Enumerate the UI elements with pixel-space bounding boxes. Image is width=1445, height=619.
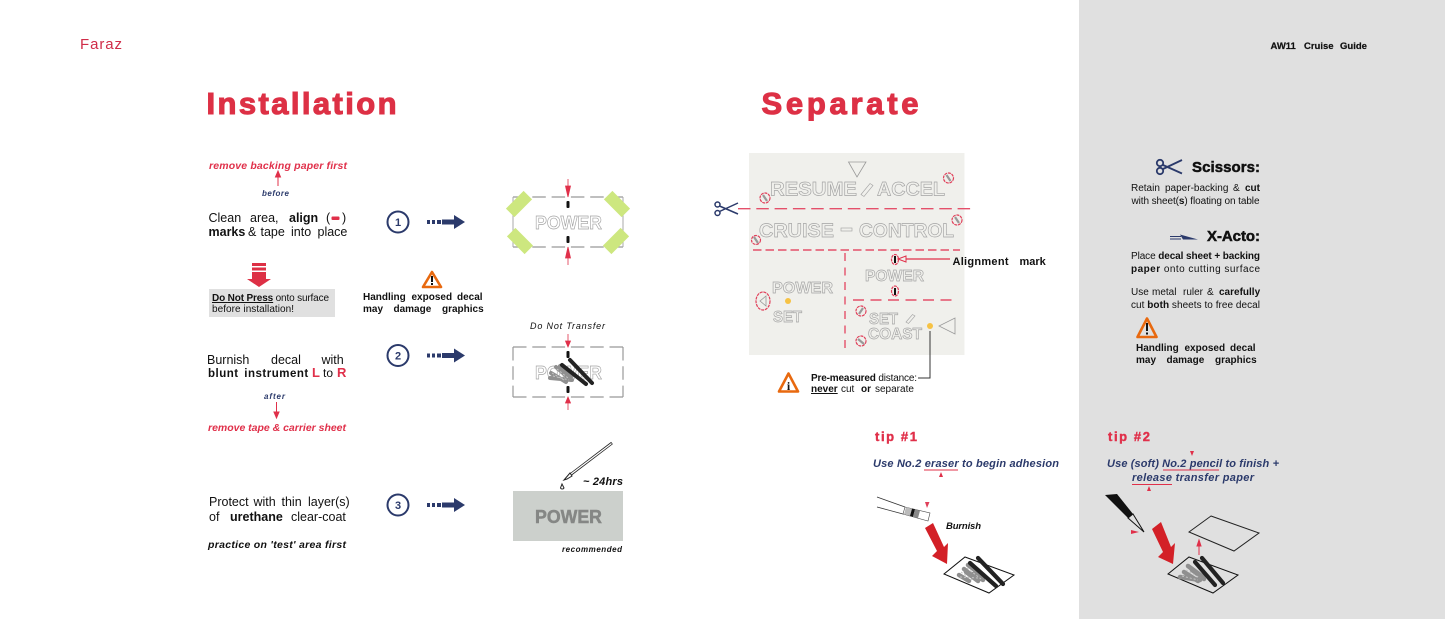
- icon: scissors at cut line: [715, 202, 738, 216]
- callout: pre-measured distance: or: [861, 384, 871, 395]
- panel: step 3 instructions: with: [252, 495, 276, 509]
- guide title: Guide: [1340, 41, 1367, 52]
- guide title: AW11: [1270, 41, 1297, 52]
- warning: handling: decal: [457, 292, 483, 303]
- heading: installation: Installation: [206, 86, 396, 121]
- warning: handling sidebar: [1136, 318, 1257, 366]
- panel: scissors instructions: [1130, 159, 1261, 207]
- heading: separate: Separate: [762, 86, 918, 121]
- arrow: big red: [925, 523, 948, 564]
- step 3 number: 3: [395, 500, 401, 512]
- step 1 text: ): [342, 211, 346, 225]
- panel: step 3 instructions: of: [209, 510, 220, 524]
- label: before: before: [262, 189, 290, 198]
- warning: handling sidebar: Handling: [1136, 343, 1179, 354]
- note: remove backing paper: remove backing paper first: [209, 160, 348, 172]
- panel: step 2 instructions: with: [320, 353, 344, 367]
- label: after: after: [264, 392, 286, 401]
- panel: x-acto instructions: paper onto cutting surface: [1131, 264, 1260, 275]
- warning: handling sidebar: graphics: [1215, 355, 1257, 366]
- panel: x-acto instructions: &: [1207, 287, 1214, 298]
- warning: handling: Handling: [363, 292, 406, 303]
- callout: pre-measured distance: separate: [875, 384, 914, 395]
- icon: eraser: [877, 497, 930, 521]
- callout: alignment mark: mark: [1020, 256, 1047, 268]
- step 1 text: &: [248, 225, 257, 239]
- arrow: step 2: [427, 348, 465, 362]
- icon: info triangle: [779, 374, 798, 393]
- diagram: decal sheet: ACCEL: [877, 178, 945, 200]
- panel: step 3 instructions: layer(s): [308, 495, 350, 509]
- callout: alignment mark: [898, 256, 1047, 268]
- step 1 number: [388, 212, 408, 232]
- arrow: big red: [1152, 522, 1175, 564]
- callout: do not press: Do Not Press onto surface: [212, 293, 329, 304]
- label: recommended: recommended: [562, 545, 623, 554]
- warning: handling: graphics: [442, 304, 484, 315]
- label: 24hrs: ~ 24hrs: [583, 476, 623, 488]
- panel: x-acto instructions: carefully: [1219, 287, 1261, 298]
- cut lines: [738, 208, 975, 210]
- diagram: step 3 clear coat: [513, 443, 623, 554]
- panel: tip 2: [1105, 429, 1280, 593]
- panel: step 2 instructions: L: [312, 365, 320, 380]
- panel: scissors instructions: cut: [1245, 183, 1261, 194]
- icon: info triangle: i: [787, 379, 791, 393]
- panel: step 2 instructions: blunt instrument: [208, 368, 309, 380]
- icon: warning triangle: [1138, 318, 1156, 337]
- icon: x-acto knife: [1170, 234, 1198, 240]
- diagram: paper with scribble: [1168, 557, 1238, 593]
- callout: do not press: [209, 289, 335, 317]
- diagram: step 3 clear coat: POWER: [535, 507, 602, 527]
- panel: step 2 instructions: [207, 353, 347, 434]
- panel: x-acto instructions: [1131, 228, 1261, 311]
- warning: handling: [363, 272, 484, 315]
- panel: tip 1: Use No.2 eraser to begin adhesion: [873, 458, 1059, 470]
- decal label: POWER: [535, 213, 602, 233]
- arrow: lift up: [1197, 540, 1201, 555]
- panel: scissors instructions: &: [1233, 183, 1240, 194]
- panel: step 1 instructions: [208, 160, 348, 239]
- step 1 text: place: [318, 225, 347, 239]
- slash markers: [752, 173, 962, 346]
- panel: grey sidebar: [1079, 0, 1445, 619]
- arrow: step 3: [427, 498, 465, 512]
- icon: scissors: [1157, 160, 1182, 174]
- panel: tip 1: tip #1: [875, 429, 917, 444]
- panel: step 2 instructions: R: [337, 365, 347, 380]
- step 1 text: Clean: [208, 211, 241, 225]
- panel: scissors instructions: paper-backing: [1165, 183, 1228, 194]
- brand logo: Faraz: [80, 36, 122, 53]
- step 1 text: align: [289, 211, 318, 225]
- diagram: decal sheet: [738, 153, 975, 355]
- diagram: decal sheet: POWER: [772, 280, 833, 297]
- warning: handling sidebar: may: [1136, 355, 1156, 366]
- pre-measured dots: [785, 298, 791, 304]
- panel: tip 2: release transfer paper: [1132, 472, 1255, 484]
- diagram: decal sheet: RESUME: [770, 178, 857, 200]
- step 1 text: [208, 211, 347, 239]
- panel: step 2 instructions: Burnish: [207, 353, 249, 367]
- warning: handling sidebar: decal: [1230, 343, 1256, 354]
- burnish scribble: [550, 360, 592, 384]
- panel: tip 2: tip #2: [1108, 429, 1150, 444]
- diagram: step 2 burnished decal: POWER: [535, 363, 602, 383]
- step 1 text: (: [326, 211, 331, 225]
- panel: step 2 instructions: decal: [271, 353, 301, 367]
- warning: handling: exposed: [412, 292, 452, 303]
- step 1 text: area,: [250, 211, 278, 225]
- diagram: lifted sheet: [1189, 516, 1259, 551]
- tape pieces: [506, 191, 630, 254]
- arrow: do not press down arrow: [247, 263, 271, 287]
- step 1 text: into: [291, 225, 311, 239]
- diagram: decal sheet: SET: [869, 311, 898, 328]
- arrow: up to note: [276, 171, 280, 186]
- note: remove tape: remove tape & carrier sheet: [208, 422, 346, 434]
- step 3 number: [388, 494, 408, 516]
- note: practice: practice on 'test' area first: [207, 539, 346, 551]
- panel: x-acto instructions: X-Acto:: [1207, 228, 1260, 245]
- panel: x-acto instructions: Use: [1131, 287, 1149, 298]
- panel: scissors instructions: with sheet(s) floating on table: [1130, 196, 1260, 207]
- panel: x-acto instructions: cut both sheets to free decal: [1131, 300, 1260, 311]
- panel: tip 1: [873, 429, 1059, 593]
- panel: x-acto instructions: metal: [1152, 287, 1176, 298]
- panel: step 3 instructions: clear-coat: [291, 510, 346, 524]
- diagram: step 1 decal taped: [506, 179, 630, 265]
- panel: step 3 instructions: Protect: [209, 495, 249, 509]
- step 1 text: tape: [260, 225, 285, 239]
- warning: handling sidebar: damage: [1166, 355, 1205, 366]
- arrow: step 1: [427, 215, 465, 229]
- diagram: decal sheet: CONTROL: [859, 220, 954, 242]
- callout: pre-measured distance: cut: [841, 384, 855, 395]
- icon: droplet: [560, 484, 564, 489]
- step 1 text: marks: [208, 225, 245, 239]
- warning: handling sidebar: exposed: [1184, 343, 1225, 354]
- callout: do not press: before installation!: [212, 304, 294, 315]
- panel: scissors instructions: Scissors:: [1192, 159, 1260, 176]
- panel: x-acto instructions: Place decal sheet + backing: [1131, 251, 1260, 262]
- callout: pre-measured distance: Pre-measured distance:: [811, 373, 917, 384]
- callout: pre-measured distance: never: [811, 384, 838, 395]
- guide title: Cruise: [1304, 41, 1334, 52]
- label: do not transfer: Do Not Transfer: [530, 321, 606, 331]
- icon: warning triangle: [423, 272, 441, 287]
- step 2 number: [388, 345, 408, 366]
- panel: step 3 instructions: urethane: [230, 510, 283, 524]
- icon: brush: [564, 443, 612, 480]
- arrow: down: [274, 402, 279, 418]
- panel: tip 2: Use (soft) No.2 pencil to finish +: [1107, 458, 1280, 470]
- step 1 number: 1: [395, 217, 401, 229]
- callout: alignment mark: Alignment: [952, 256, 1009, 268]
- diagram: step 2 burnished decal: [513, 321, 623, 410]
- panel: step 2 instructions: to: [323, 366, 333, 380]
- label: burnish: Burnish: [946, 521, 981, 532]
- alignment marks: [566, 201, 570, 208]
- diagram: decal sheet: COAST: [868, 326, 922, 343]
- panel: x-acto instructions: ruler: [1183, 287, 1204, 298]
- warning: handling: may: [363, 304, 383, 315]
- diagram: decal sheet: CRUISE: [759, 220, 834, 242]
- panel: scissors instructions: Retain: [1131, 183, 1160, 194]
- diagram: decal sheet: POWER: [865, 268, 924, 285]
- callout: pre-measured distance: [779, 331, 930, 395]
- icon: pencil: [1105, 494, 1144, 534]
- step 2 number: 2: [395, 350, 401, 362]
- panel: step 3 instructions: [207, 495, 350, 551]
- warning: handling: damage: [394, 304, 432, 315]
- diagram: paper with scribble: [944, 557, 1014, 593]
- panel: step 3 instructions: thin: [282, 495, 302, 509]
- diagram: decal sheet: SET: [773, 309, 802, 326]
